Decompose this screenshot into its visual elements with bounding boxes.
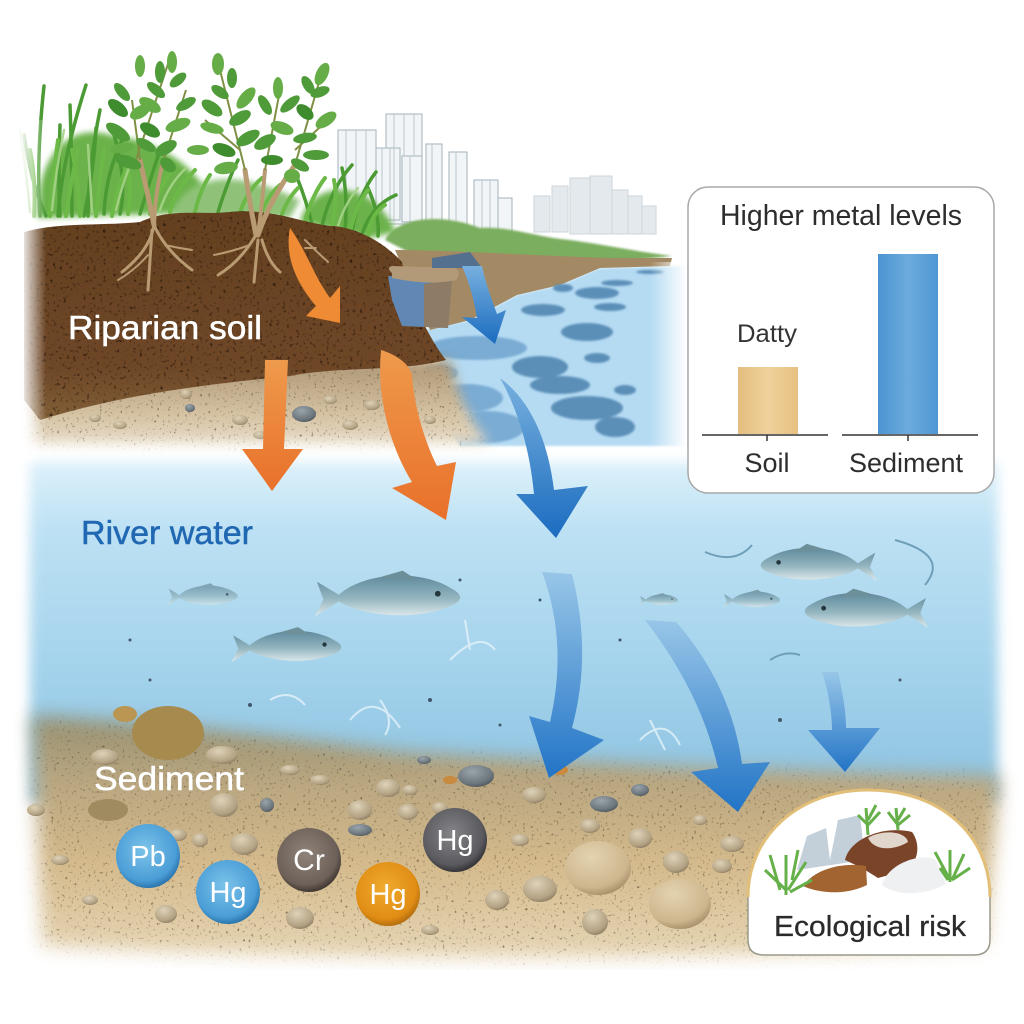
metal: Pb xyxy=(116,824,180,888)
metal: Hg orange xyxy=(356,862,420,926)
scene: riparian soil mass xyxy=(24,211,446,420)
panel: bar chart xyxy=(688,187,994,493)
panel: sediment bed xyxy=(0,700,1024,970)
axis label: Soil: Soil xyxy=(744,448,790,478)
scene: grass base xyxy=(36,132,396,238)
arrow: soil to water left xyxy=(242,360,303,491)
metal: Hg dark: Hg xyxy=(436,825,474,857)
arrow: river surface to water xyxy=(500,378,588,538)
metal: Hg orange: Hg xyxy=(369,879,407,911)
bar label: Datty: Datty xyxy=(737,320,798,348)
river body xyxy=(30,462,998,802)
fish group xyxy=(168,544,928,662)
arrow: soil to bank orange xyxy=(289,228,340,323)
label: Ecological risk: Ecological risk xyxy=(774,911,967,943)
scene: grass blades xyxy=(20,85,396,236)
metal: Pb: Pb xyxy=(130,841,166,873)
label: Sediment: Sediment xyxy=(94,760,244,797)
scene: city skyline left xyxy=(338,114,512,232)
panel: ecological risk xyxy=(748,790,990,955)
scene: far bank strip xyxy=(395,250,672,330)
label: River water: River water xyxy=(81,514,253,551)
metal: Hg blue xyxy=(196,860,260,924)
arrow: soil to water right xyxy=(380,350,456,520)
icon: discharge container on bank xyxy=(388,252,482,328)
scene: river surface behind the bank xyxy=(423,266,686,446)
metal: Cr: Cr xyxy=(293,844,325,877)
metal pollutant spheres xyxy=(116,808,487,926)
scene: tree leaves xyxy=(103,51,339,183)
arrow: water to sediment 1 xyxy=(529,572,604,778)
scene: distant riverbank vegetation xyxy=(385,219,672,262)
bar: sediment xyxy=(878,254,938,434)
metal: Cr xyxy=(277,828,341,892)
debris in water xyxy=(128,540,933,750)
bar: soil xyxy=(738,367,798,434)
arrow: water to sediment 2 xyxy=(645,620,770,812)
scene: river right edge fade xyxy=(650,262,687,452)
label: Riparian soil: Riparian soil xyxy=(68,309,262,346)
arrow: bank runoff xyxy=(462,266,506,344)
scene: tree branches xyxy=(132,58,330,170)
chart title: Higher metal levels xyxy=(720,200,962,232)
metal: Hg blue: Hg xyxy=(209,877,247,909)
icon: ecosystem scene xyxy=(765,805,970,895)
edge fade: left bank xyxy=(12,120,46,460)
sediment pebbles xyxy=(27,706,744,935)
arrow: water to sediment 3 xyxy=(808,672,880,772)
large stones xyxy=(565,841,711,929)
scene: riparian shore gravel xyxy=(26,352,493,453)
axis label: Sediment: Sediment xyxy=(849,448,964,478)
scene: river rocks xyxy=(422,270,664,443)
boulder xyxy=(132,706,204,760)
axes xyxy=(702,435,978,441)
scene: city skyline right xyxy=(534,176,656,234)
scene: tree trunks and roots xyxy=(118,160,328,290)
metal: Hg dark xyxy=(423,808,487,872)
